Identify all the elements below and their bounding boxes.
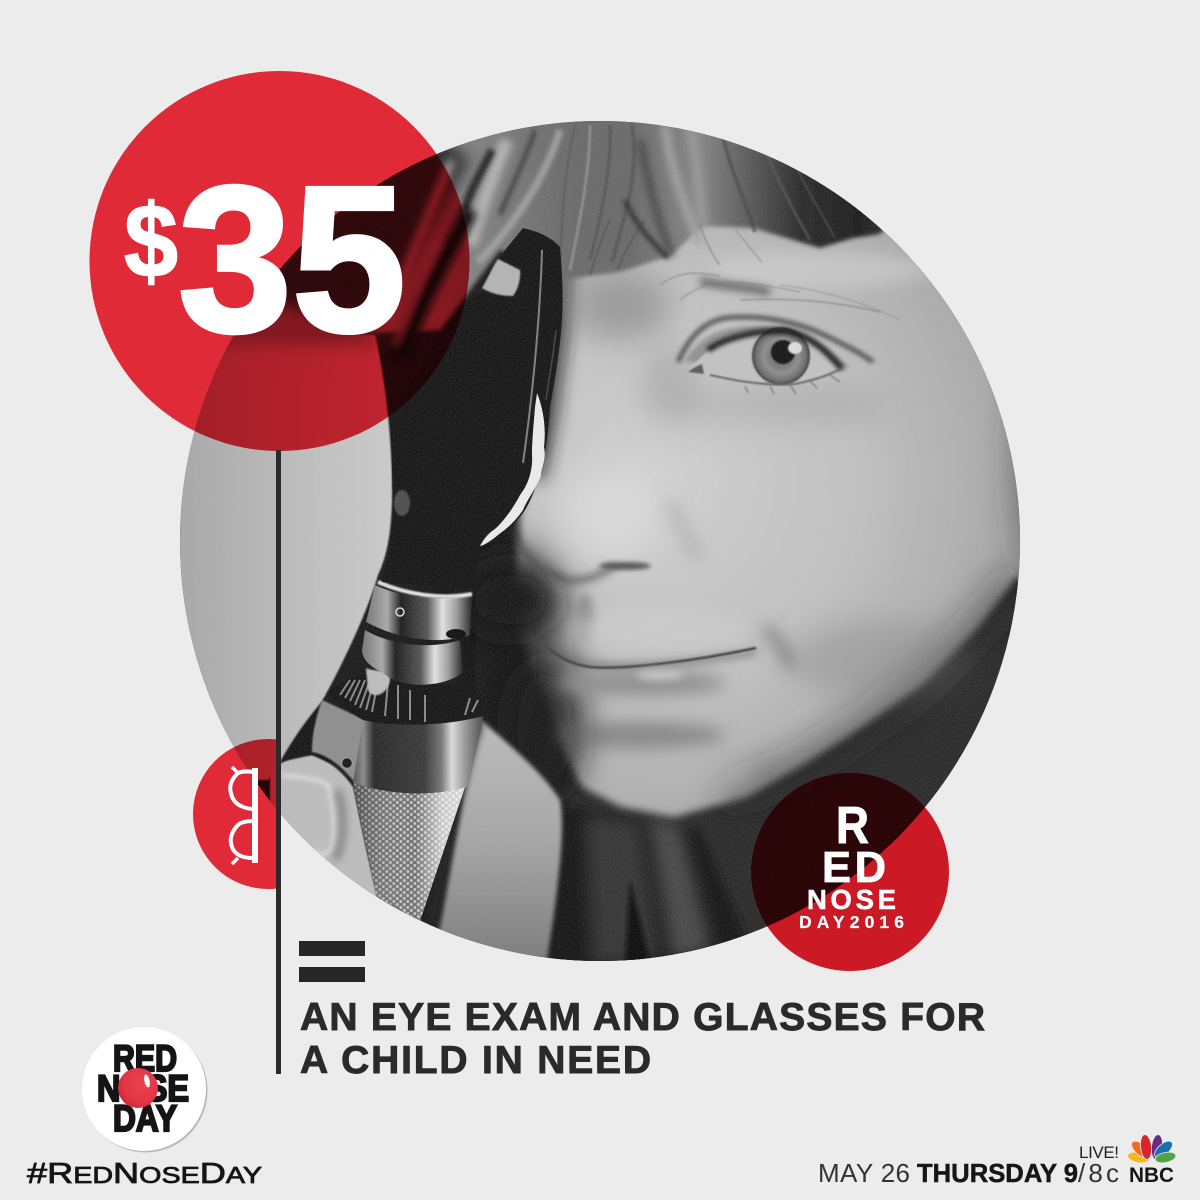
photo: nose	[515, 500, 700, 641]
Red Nose Day logo	[82, 1027, 208, 1152]
badge text: R	[836, 797, 869, 855]
badge text: NOSE	[807, 884, 896, 915]
hashtag: #R ED NOSE DAY	[27, 1158, 262, 1190]
photo: arm on the left	[170, 335, 392, 780]
photo: lower right dark clothing	[520, 590, 1030, 970]
logo wordmark: DAY	[113, 1098, 177, 1139]
air date line: THURSDAY 9	[917, 1158, 1078, 1188]
badge disc	[751, 773, 949, 971]
headline text: AN EYE EXAM AND GLASSES FOR	[300, 996, 985, 1039]
small red disc	[193, 739, 276, 889]
photo: eye	[678, 317, 873, 394]
icon: equals sign	[299, 941, 365, 982]
air date line	[818, 1158, 1119, 1188]
photo: eyebrow	[660, 273, 900, 320]
air date line: MAY 26	[818, 1158, 910, 1188]
dollar sign: $	[124, 184, 178, 300]
logo wordmark: NOSE	[97, 1068, 189, 1109]
live label: LIVE!	[1079, 1143, 1119, 1162]
photo: otoscope head	[382, 228, 563, 590]
logo wordmark	[97, 1038, 189, 1139]
photo: face skin	[455, 215, 1057, 817]
logo disc	[84, 1028, 208, 1152]
red circle with price	[90, 71, 470, 451]
photo: hair	[226, 121, 885, 362]
photo: otoscope handle	[280, 582, 483, 921]
price: 35: 35	[178, 144, 406, 376]
red disc	[90, 71, 470, 451]
vertical divider line	[276, 450, 281, 1074]
badge text: DAY2016	[799, 912, 904, 932]
badge text: ED	[822, 844, 886, 892]
red badge: Red Nose Day 2016	[751, 773, 949, 971]
NBC logo	[1127, 1134, 1177, 1187]
photo: mouth	[535, 612, 792, 696]
badge text	[799, 797, 904, 932]
headline text	[300, 996, 985, 1082]
small red circle with glasses icon	[193, 739, 276, 889]
icon: peacock feathers	[1127, 1134, 1177, 1165]
NBC wordmark: NBC	[1129, 1164, 1174, 1187]
photo: film grain	[180, 121, 1020, 961]
air date line: /8c	[1078, 1158, 1119, 1188]
logo wordmark: RED	[113, 1038, 177, 1079]
headline text: A CHILD IN NEED	[300, 1039, 651, 1082]
icon: glasses	[230, 767, 255, 864]
photo: fingers holding the otoscope	[270, 720, 562, 960]
circular photo: child with otoscope	[170, 100, 1057, 970]
red clown nose	[118, 1068, 158, 1108]
